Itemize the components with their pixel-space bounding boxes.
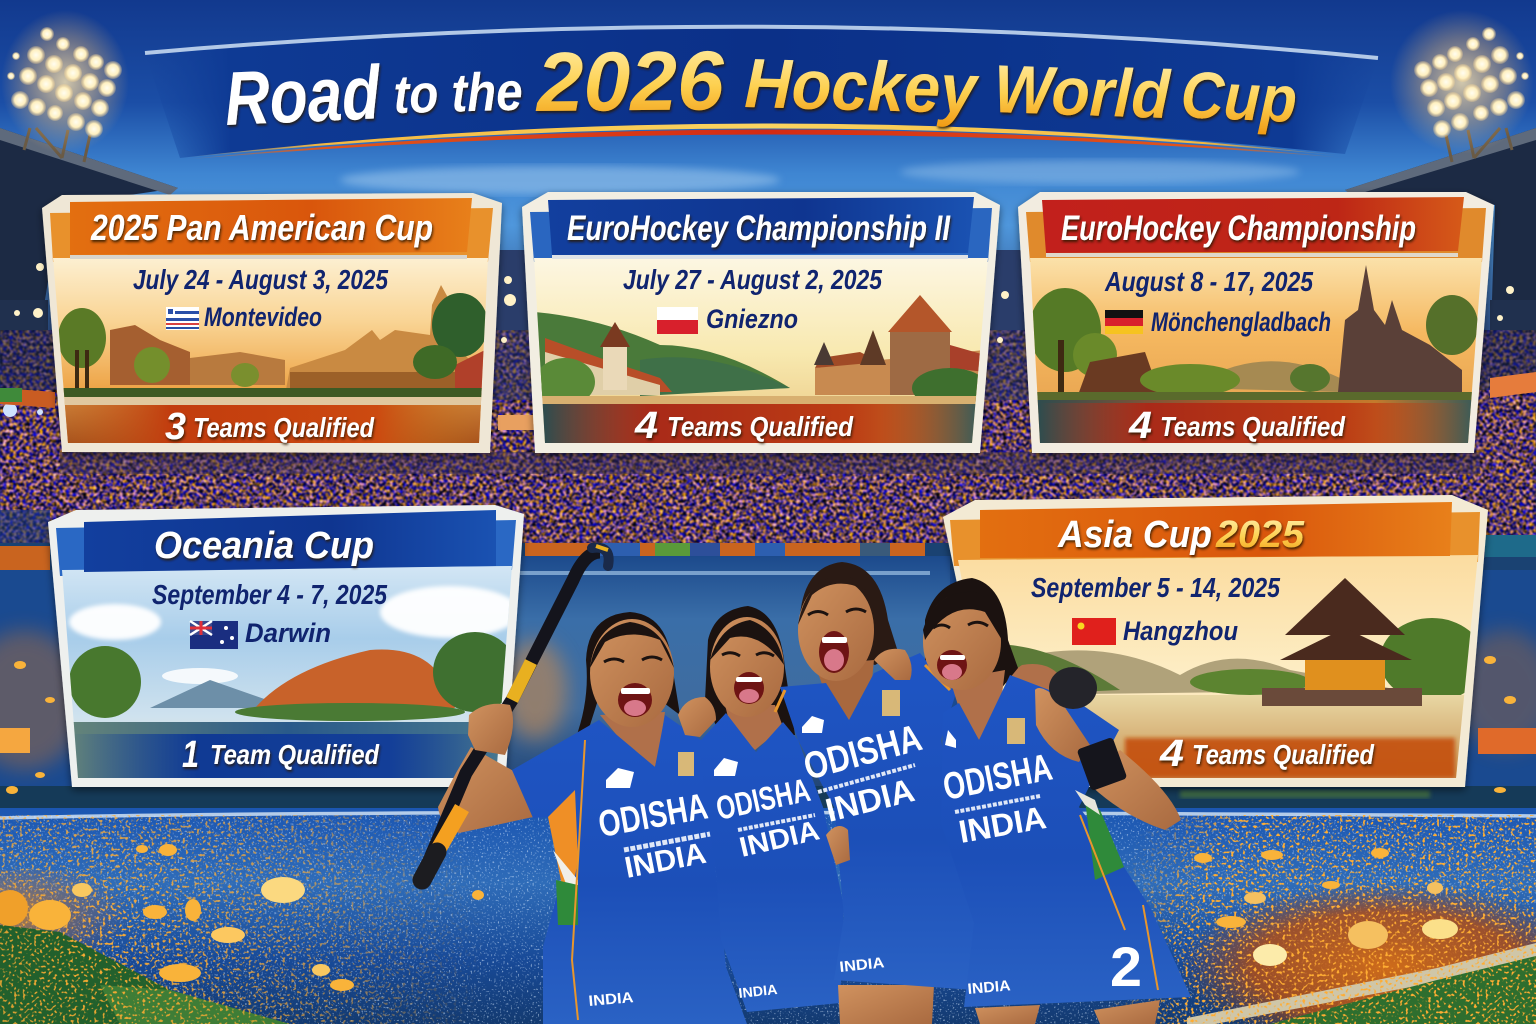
panel: EuroHockey Championship II [520, 192, 1000, 453]
teams qualified: 4 [634, 405, 658, 447]
location with Germany flag [1105, 307, 1331, 337]
teams qualified [1128, 405, 1346, 447]
teams qualified [182, 734, 380, 776]
title text [223, 33, 1299, 142]
title text: Cup [1179, 57, 1299, 136]
player three: INDIA [822, 771, 918, 829]
player one: ODISHA [595, 785, 711, 845]
teams qualified: 4 [1159, 733, 1184, 775]
location with Poland flag [657, 304, 798, 334]
teams qualified: Teams Qualified [667, 411, 854, 442]
player four: INDIA [956, 799, 1049, 850]
heading ribbon [70, 198, 472, 259]
location with Australia flag: Darwin [245, 618, 331, 648]
crowd stands [0, 330, 1536, 545]
heading ribbon: Oceania Cup [154, 525, 374, 567]
jersey logo and crest [802, 690, 900, 733]
confetti sparks [0, 656, 1516, 991]
date: August 8 - 17, 2025 [1104, 266, 1313, 297]
floodlight left [1, 10, 129, 162]
title banner [145, 27, 1378, 160]
teams qualified: 3 [165, 406, 186, 448]
teams qualified: 4 [1128, 405, 1152, 447]
stadium advertising strip [0, 535, 1536, 571]
orange sparks [0, 815, 1536, 1024]
teams qualified [1159, 733, 1375, 775]
title text: to the [393, 62, 523, 125]
location with Uruguay flag [166, 302, 322, 332]
heading ribbon: 2025 [1215, 514, 1305, 556]
player one [438, 612, 747, 1024]
location with China flag [1072, 616, 1238, 646]
location with China flag: Hangzhou [1123, 616, 1238, 646]
hand on shoulder [678, 649, 912, 865]
date: September 4 - 7, 2025 [152, 579, 387, 610]
hockey players group [420, 546, 1191, 1024]
location with Australia flag [190, 618, 331, 649]
player four: INDIA [967, 977, 1011, 998]
date: July 27 - August 2, 2025 [623, 264, 882, 295]
teams qualified [165, 406, 375, 448]
player four: ODISHA [940, 747, 1056, 809]
heading ribbon: EuroHockey Championship II [567, 209, 951, 248]
title text: World [992, 51, 1172, 133]
heading ribbon [84, 510, 496, 572]
location with Uruguay flag: Montevideo [204, 302, 322, 332]
date: September 5 - 14, 2025 [1031, 572, 1280, 603]
hand gripping stick [468, 704, 513, 755]
panel: Oceania Cup [48, 505, 528, 787]
jersey logo [714, 758, 738, 776]
heading ribbon [980, 502, 1452, 558]
field sparkle [0, 815, 1536, 1024]
player two: INDIA [738, 981, 778, 1001]
player four [923, 578, 1191, 1024]
location with Germany flag: Mönchengladbach [1151, 307, 1331, 337]
jersey logo and crest [945, 718, 1025, 748]
player two: INDIA [736, 814, 822, 863]
player three [775, 562, 976, 1024]
panel: EuroHockey Championship [1015, 192, 1495, 453]
title text: Road [223, 50, 383, 142]
hockey stick [420, 546, 609, 882]
heading ribbon: EuroHockey Championship [1061, 209, 1416, 248]
teams qualified: 1 [182, 734, 199, 776]
jersey logo and crest [606, 752, 694, 788]
player three: INDIA [839, 954, 885, 976]
panel: 2025 Pan American Cup [40, 193, 502, 453]
floodlight right [1390, 10, 1534, 162]
player three: ODISHA [799, 717, 926, 789]
panel: Asia Cup 2025 [930, 495, 1490, 790]
teams qualified: Teams Qualified [193, 412, 375, 443]
location with Poland flag: Gniezno [706, 304, 798, 334]
green pitch corners [0, 925, 1536, 1024]
player four: 2 [1110, 935, 1142, 998]
date: July 24 - August 3, 2025 [133, 264, 388, 295]
heading ribbon: Asia Cup [1057, 514, 1212, 556]
heading ribbon [548, 197, 974, 259]
heading ribbon [1042, 197, 1464, 257]
title text: 2026 [534, 33, 725, 129]
teams qualified [634, 405, 854, 447]
teams qualified: Teams Qualified [1160, 411, 1346, 442]
player two: ODISHA [713, 771, 813, 827]
teams qualified: Team Qualified [210, 739, 380, 770]
teams qualified: Teams Qualified [1192, 739, 1375, 770]
player two [698, 606, 844, 1012]
player one: INDIA [588, 989, 634, 1010]
player one: INDIA [622, 837, 709, 885]
heading ribbon: 2025 Pan American Cup [90, 207, 433, 248]
title text: Hockey [744, 44, 980, 128]
